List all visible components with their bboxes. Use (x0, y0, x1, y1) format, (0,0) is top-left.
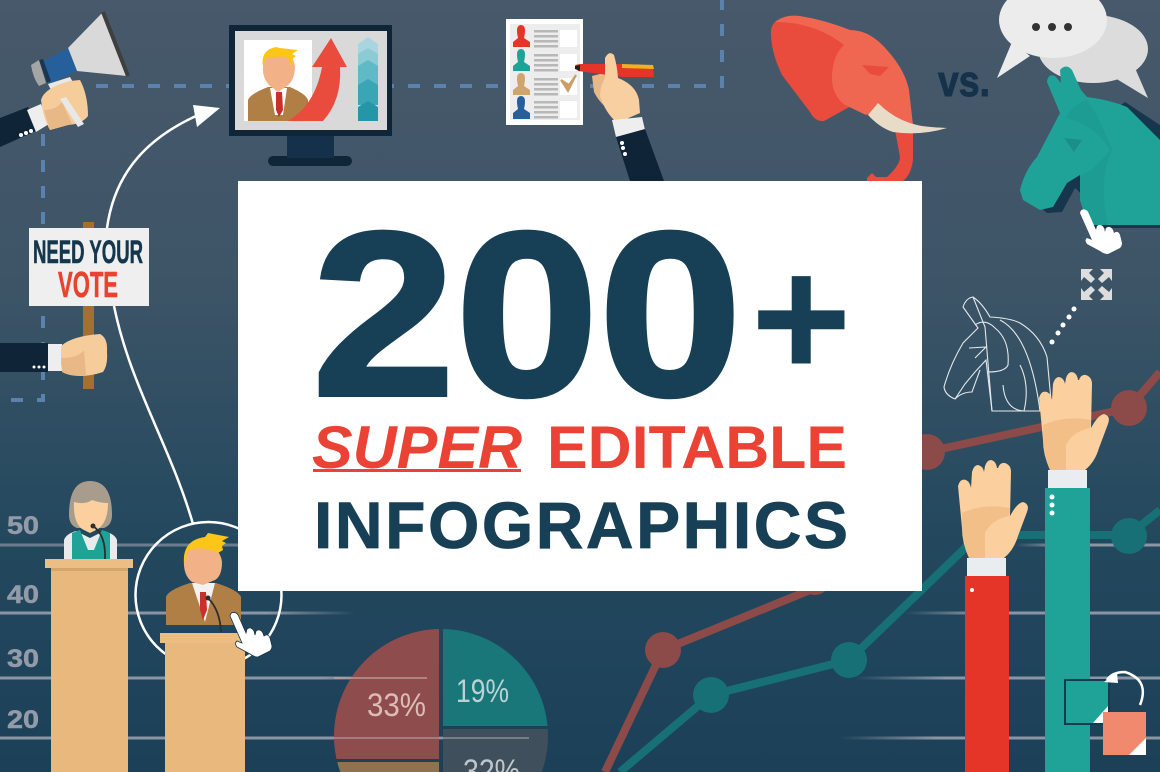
subtitle: infographics: INFOGRAPHICS (314, 488, 848, 562)
axis numbers: 20 (7, 706, 39, 734)
pie chart: 19% (456, 673, 509, 709)
vote sign and hand: VOTE (58, 264, 118, 305)
line chart: red series (605, 372, 1160, 772)
axis numbers (7, 512, 39, 734)
subtitle: super editable: SUPER (312, 414, 522, 481)
elephant head (771, 16, 947, 181)
axis numbers: 40 (7, 581, 39, 609)
pie chart (330, 625, 553, 772)
flip squares icon (1065, 672, 1146, 755)
raised hand: red sleeve (958, 460, 1028, 772)
chart grid lines (0, 544, 1160, 740)
podium: male candidate (160, 533, 245, 772)
wireframe donkey (944, 297, 1052, 411)
podium: female candidate (45, 481, 133, 772)
cursor hand on candidate (230, 612, 272, 657)
headline number: 200 (312, 183, 742, 445)
selection circle (136, 522, 282, 668)
cursor hand on donkey (1080, 209, 1122, 254)
donkey head (1020, 66, 1160, 228)
versus label: vs. (938, 57, 990, 106)
vote sign and hand: NEED YOUR (33, 234, 143, 270)
curved arrow from candidate to monitor (107, 105, 220, 524)
checklist with hand and pen (506, 19, 664, 181)
raised hand: teal sleeve (1039, 372, 1109, 772)
pie chart: 33% (367, 687, 426, 723)
monitor with candidate and rising arrow (229, 25, 392, 166)
plus sign: + (751, 222, 851, 414)
line chart: teal series (620, 510, 1160, 772)
expand icon (1081, 269, 1112, 300)
subtitle: super editable (312, 414, 847, 481)
dotted connector (1050, 306, 1076, 344)
dashed guide lines (6, 0, 722, 400)
speech bubbles (997, 0, 1148, 98)
subtitle: super editable: EDITABLE (547, 414, 847, 481)
axis numbers: 50 (7, 512, 39, 540)
vote sign and hand (0, 222, 149, 389)
megaphone and hand (0, 12, 128, 147)
axis numbers: 30 (7, 645, 39, 673)
